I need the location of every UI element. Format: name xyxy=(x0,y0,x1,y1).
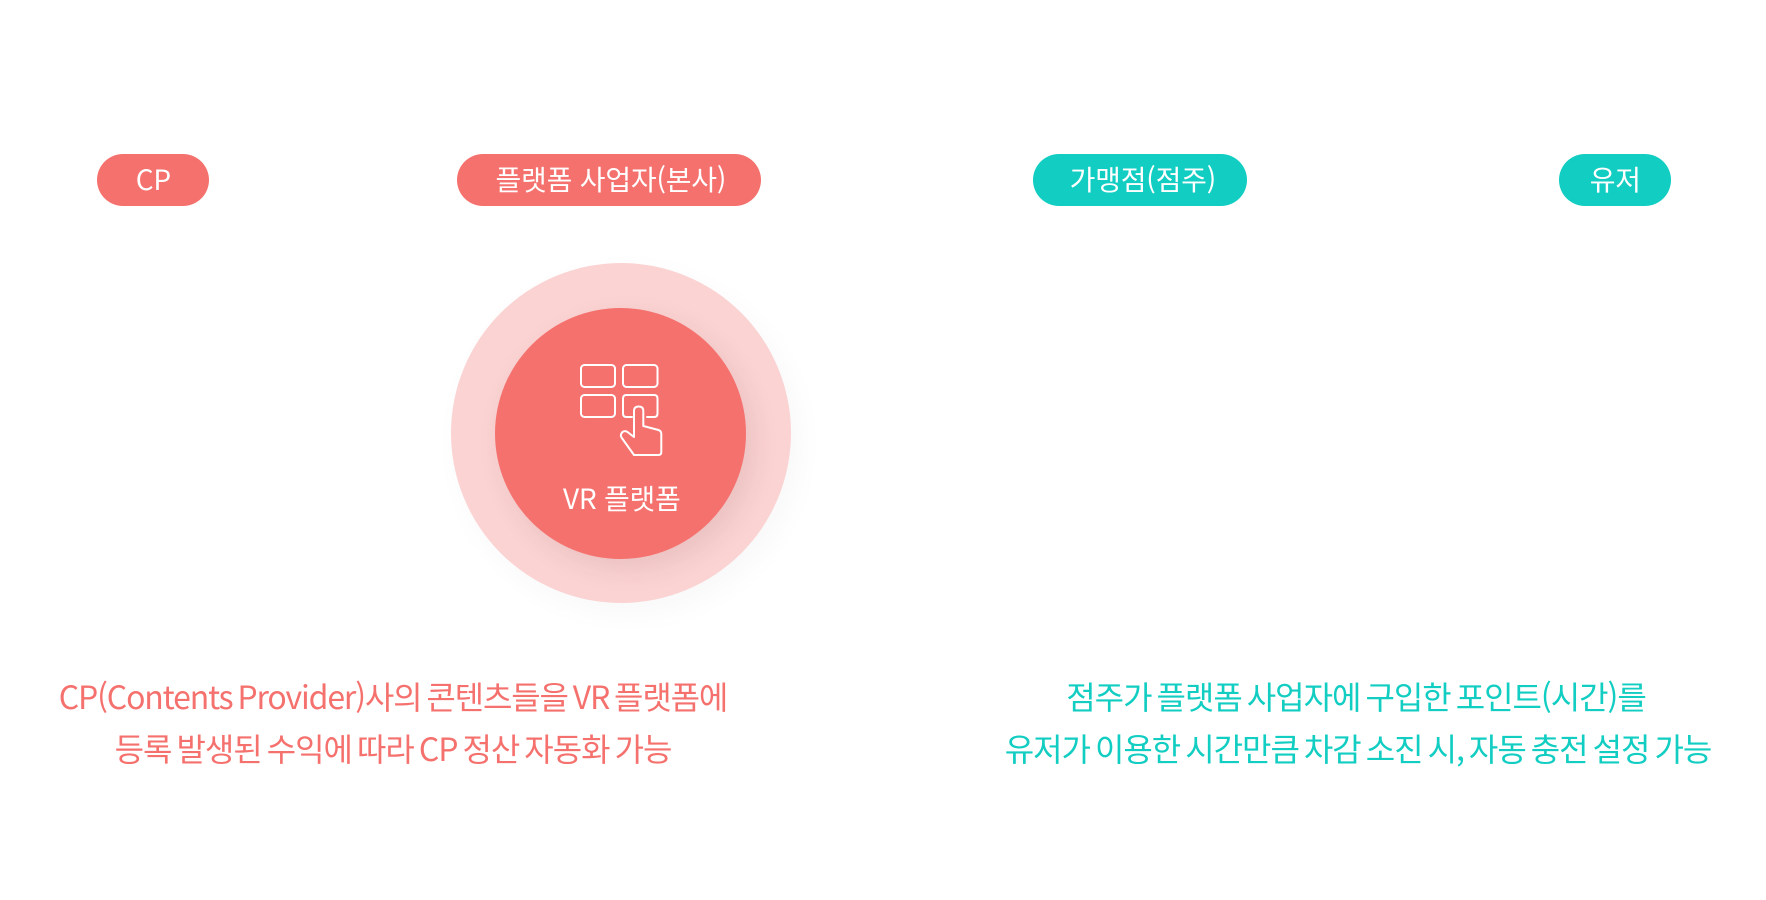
text: CP description: CP(Contents Provider)사의 콘텐츠들을 VR 플랫폼에 xyxy=(59,672,727,718)
text: CP description: 등록 발생된 수익에 따라 CP 정산 자동화 가능 xyxy=(115,724,671,770)
pill: platform operator xyxy=(457,154,761,206)
outer pale circle xyxy=(451,263,791,603)
pill: user xyxy=(1559,154,1671,206)
pill: user: 유저 xyxy=(1590,159,1641,199)
pill: franchise: 가맹점(점주) xyxy=(1070,159,1216,199)
pill: CP: CP xyxy=(136,159,171,199)
text: franchise description xyxy=(1005,672,1711,770)
text: CP description xyxy=(59,672,727,770)
text: franchise description: 유저가 이용한 시간만큼 차감 소진 시, 자동 충전 설정 가능 xyxy=(1005,724,1711,770)
pill: platform operator: 플랫폼 사업자(본사) xyxy=(495,159,726,199)
label: VR platform: VR 플랫폼 xyxy=(563,478,680,518)
text: franchise description: 점주가 플랫폼 사업자에 구입한 포인트(시간)를 xyxy=(1066,672,1646,718)
inner circle: VR platform xyxy=(495,308,746,559)
icon: grid with tapping hand xyxy=(580,364,662,456)
pill: CP xyxy=(97,154,209,206)
pill: franchise xyxy=(1033,154,1247,206)
